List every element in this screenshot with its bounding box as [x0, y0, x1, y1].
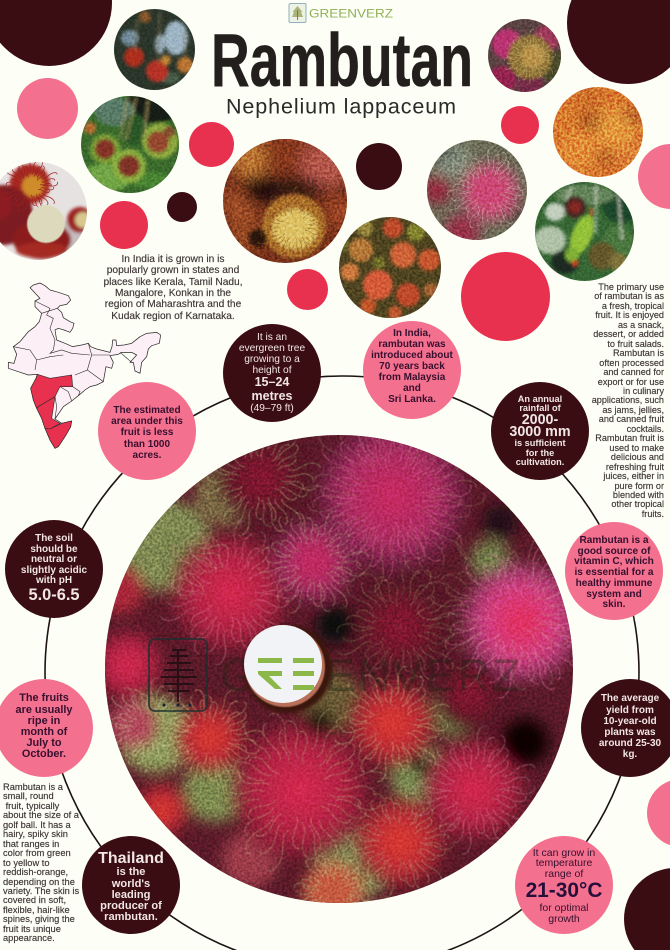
callout: evergreen tree height: metres	[252, 388, 292, 402]
callout: evergreen tree height: growing to a	[244, 354, 300, 365]
callout: evergreen tree height: It is an	[257, 332, 287, 343]
text block: primary use: in culinary	[623, 386, 664, 396]
photo: cluster of small fruits	[339, 217, 441, 318]
text block: primary use: blended with	[613, 490, 664, 500]
callout: estimated area: than 1000	[124, 439, 170, 450]
text block: fruit description: golf ball. It has a	[3, 820, 71, 830]
decorative circle: red lower left	[100, 201, 148, 249]
callout: Thailand leading producer: world's	[112, 878, 150, 890]
text block: primary use: and canned for	[603, 367, 664, 377]
text block: primary use: and canned fruit	[599, 414, 664, 424]
callout: evergreen tree height: height of	[252, 365, 292, 376]
callout: ripening months: ripe in	[28, 715, 60, 727]
text block: primary use: to fruit salads.	[607, 339, 664, 349]
text block: fruit description: depending on the	[3, 877, 75, 887]
text block: primary use: applications, such	[592, 395, 664, 405]
photo: green spiny fruits	[81, 96, 179, 193]
Kerala and Tamil Nadu	[45, 421, 72, 448]
callout: introduced to India: 70 years back	[379, 361, 445, 372]
callout: Thailand leading producer	[82, 836, 180, 934]
text block: fruit description	[3, 782, 79, 944]
callout: ripening months	[0, 679, 93, 777]
callout: annual rainfall: rainfall of	[519, 403, 561, 413]
callout: average yield	[581, 679, 670, 777]
callout: soil pH: 5.0-6.5	[28, 586, 80, 604]
peeled white fruit	[244, 625, 332, 713]
photo: golden and pink fruit	[488, 19, 561, 92]
callout: soil pH: neutral or	[31, 554, 77, 565]
callout: introduced to India	[363, 321, 461, 419]
text block: where it is grown in India: In India it is grown in is	[121, 254, 225, 265]
callout: introduced to India: rambutan was	[378, 339, 446, 350]
internal state borders	[13, 301, 132, 419]
main photo: rambutan pile with watermark	[105, 435, 573, 903]
text block: fruit description: small, round	[3, 791, 54, 801]
text block: primary use: as a snack,	[618, 320, 664, 330]
decorative circle: big red	[461, 252, 550, 341]
photo: fruit hanging on tree	[114, 9, 195, 90]
decorative circle: top-left dark	[0, 0, 112, 66]
callout: soil pH: with pH	[36, 575, 72, 586]
text block: primary use: used to make	[609, 443, 664, 453]
text block: where it is grown in India: Mangalore, Konkan in the	[115, 288, 231, 299]
callout: average yield: The average	[601, 693, 659, 704]
photo: opened fruit with white flesh	[0, 162, 87, 260]
callout: evergreen tree height: (49–79 ft)	[250, 403, 294, 414]
text block: fruit description: Rambutan is a	[3, 782, 63, 792]
photo: green parrot with fruit	[535, 182, 634, 281]
callout: average yield: plants was	[604, 727, 656, 738]
text block: primary use: juices, either in	[603, 471, 664, 481]
text block: primary use: cocktails.	[627, 424, 664, 434]
text block: primary use: fruit. It is enjoyed	[595, 310, 664, 320]
text block: primary use: Rambutan fruit is	[595, 433, 664, 443]
text block: primary use: other tropical	[611, 499, 664, 509]
photo: pink fruit with pale spines	[427, 140, 527, 240]
callout: Thailand leading producer: leading	[112, 889, 150, 901]
callout: soil pH: slightly acidic	[21, 565, 87, 576]
callout: vitamin C: vitamin C, which	[574, 556, 654, 567]
subtitle: Nephelium lappaceum	[226, 94, 456, 118]
callout: temperature range: for optimal	[539, 902, 589, 914]
Maharashtra	[31, 374, 73, 408]
text block: primary use: Rambutan is	[613, 348, 664, 358]
callout: Thailand leading producer: producer of	[100, 900, 162, 912]
callout: annual rainfall	[491, 382, 589, 480]
text block: primary use: The primary use	[598, 282, 664, 292]
text block: fruit description: appearance.	[3, 933, 55, 943]
Karnataka	[37, 397, 60, 429]
callout: temperature range	[515, 836, 613, 934]
callout: vitamin C: skin.	[602, 599, 626, 610]
callout: temperature range: growth	[548, 913, 580, 925]
decorative circle: small dark	[167, 192, 197, 222]
decorative circle: red centre	[287, 269, 328, 310]
callout: annual rainfall: is sufficient	[514, 438, 566, 448]
text block: fruit description: about the size of a	[3, 810, 79, 820]
text block: fruit description: that ranges in	[3, 839, 59, 849]
text block: primary use: as jams, jellies,	[602, 405, 664, 415]
photo: orange spiky fruit	[553, 87, 643, 177]
callout: vitamin C	[565, 522, 663, 620]
watermark text: GREENVERZ	[220, 650, 520, 701]
text block: fruit description: hairy, spiky skin	[3, 829, 68, 839]
photo: orange-brown fruit closeup	[223, 139, 347, 263]
watermark logo	[149, 639, 207, 711]
text block: fruit description: reddish-orange,	[3, 867, 68, 877]
callout: introduced to India: In India,	[393, 328, 431, 339]
country outline	[8, 283, 161, 448]
text block: where it is grown in India: region of Maharashtra and the	[105, 299, 241, 310]
callout: introduced to India: and	[403, 383, 421, 394]
callout: vitamin C: is essential for a	[574, 567, 654, 578]
map of India with highlighted southwest states	[8, 282, 161, 449]
callout: ripening months: are usually	[16, 704, 72, 716]
text block: where it is grown in India: Kudak region of Karnataka.	[111, 311, 235, 322]
callout: soil pH: The soil	[35, 533, 73, 544]
callout: annual rainfall: 2000-	[522, 412, 558, 428]
callout: annual rainfall: An annual	[518, 394, 562, 404]
callout: estimated area: The estimated	[113, 405, 181, 416]
text block: fruit description: spines, giving the	[3, 914, 75, 924]
callout: estimated area	[98, 382, 196, 480]
text block: primary use: delicious and	[611, 452, 664, 462]
callout: Thailand leading producer: is the	[116, 866, 145, 878]
text block: fruit description: fruit its unique	[3, 924, 61, 934]
text block: fruit description: to yellow to	[3, 858, 50, 868]
callout: Thailand leading producer: rambutan.	[104, 911, 158, 923]
callout: annual rainfall: 3000 mm	[509, 424, 571, 440]
watermark letters on white fruit	[258, 658, 314, 690]
text block: primary use: pure form or	[614, 481, 664, 491]
callout: average yield: around 25-30	[599, 738, 661, 749]
callout: vitamin C: system and	[586, 589, 642, 600]
callout: annual rainfall: cultivation.	[516, 457, 564, 467]
callout: temperature range: 21-30°C	[526, 879, 602, 902]
callout: evergreen tree height: evergreen tree	[239, 343, 305, 354]
decorative circle: dark centre	[356, 143, 402, 190]
text block: primary use: a fresh, tropical	[602, 301, 664, 311]
text block: primary use: often processed	[599, 358, 664, 368]
callout: vitamin C: Rambutan is a	[580, 535, 648, 546]
text block: where it is grown in India: places like Kerala, Tamil Nadu,	[103, 277, 243, 288]
callout: temperature range: temperature	[536, 857, 592, 869]
callout: estimated area: area under this	[111, 416, 183, 427]
callout: temperature range: It can grow in	[533, 847, 595, 859]
callout: average yield: yield from	[606, 705, 654, 716]
callout: ripening months: October.	[22, 748, 66, 760]
callout: average yield: kg.	[623, 749, 637, 760]
text block: fruit description: flexible, hair-like	[3, 905, 70, 915]
callout: vitamin C: good source of	[578, 546, 650, 556]
text block: fruit description: color from green	[3, 848, 71, 858]
callout: soil pH	[5, 520, 103, 618]
text block: primary use: of rambutan is as	[594, 291, 664, 301]
decorative circle: right pink	[638, 144, 670, 209]
text block: primary use: dessert, or added	[593, 329, 664, 339]
decorative circle: top-right dark	[567, 0, 670, 84]
callout: annual rainfall: for the	[526, 448, 554, 458]
text block: where it is grown in India: popularly grown in states and	[107, 265, 239, 276]
decorative circle: lower right pink	[647, 779, 670, 847]
callout: soil pH: should be	[30, 544, 78, 555]
callout: temperature range: range of	[545, 868, 583, 880]
callout: evergreen tree height	[223, 324, 321, 422]
callout: introduced to India: Sri Lanka.	[388, 394, 436, 405]
decorative circle: red upper right	[501, 106, 539, 144]
callout: ripening months: July to	[26, 737, 62, 749]
callout: estimated area: fruit is less	[121, 427, 173, 438]
callout: vitamin C: healthy immune	[576, 578, 652, 589]
text block: primary use: refreshing fruit	[606, 462, 664, 472]
text block: where it is grown in India	[103, 254, 243, 322]
text block: primary use: export or for use	[598, 377, 664, 387]
logo: Greenverz: GREENVERZ	[309, 6, 393, 20]
callout: introduced to India: from Malaysia	[379, 372, 445, 383]
text block: fruit description: covered in soft,	[3, 895, 66, 905]
callout: Thailand leading producer: Thailand	[98, 850, 164, 867]
callout: evergreen tree height: 15–24	[255, 375, 289, 389]
text block: fruit description: variety. The skin is	[3, 886, 79, 896]
logo: Greenverz	[288, 3, 393, 23]
text block: fruit description: fruit, typically	[6, 801, 59, 811]
callout: introduced to India: introduced about	[371, 350, 453, 361]
decorative circle: bottom-right dark	[624, 868, 670, 950]
text block: primary use	[592, 282, 664, 519]
decorative circle: left pink	[17, 78, 78, 139]
callout: ripening months: The fruits	[19, 692, 69, 704]
callout: estimated area: acres.	[133, 450, 161, 461]
decorative circle: red near title	[189, 122, 234, 167]
callout: average yield: 10-year-old	[603, 716, 657, 727]
callout: ripening months: month of	[21, 726, 67, 738]
text block: primary use: fruits.	[642, 509, 664, 519]
